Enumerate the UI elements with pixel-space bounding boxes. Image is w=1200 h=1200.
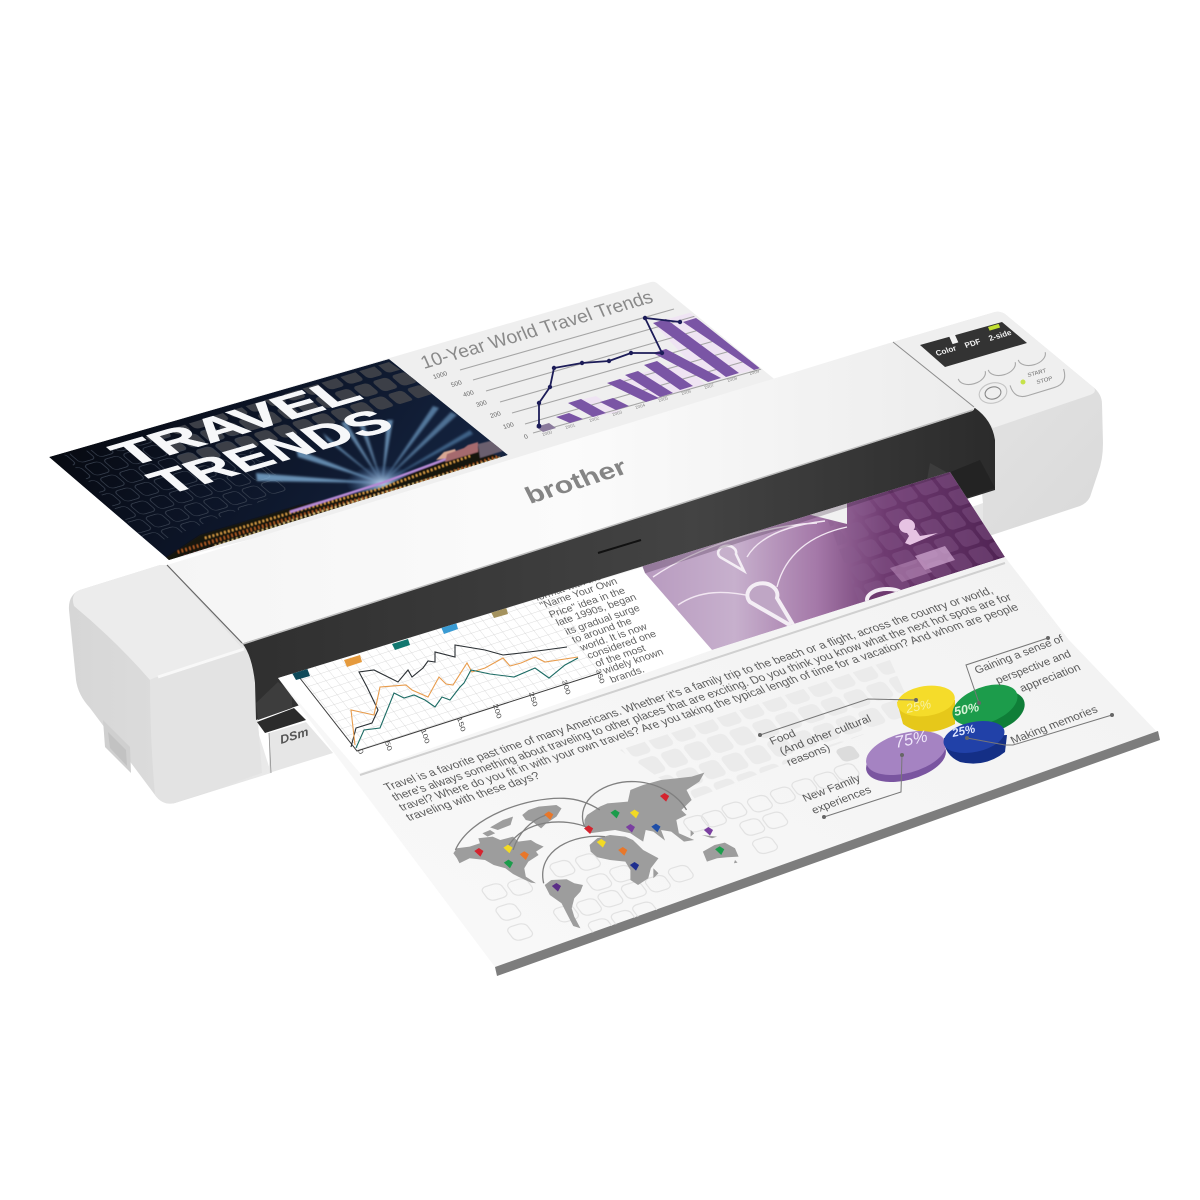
start stop labels [1020,368,1053,386]
chart x axis labels [356,668,606,756]
chart axis labels: 1000 [432,370,449,381]
chart axis labels: 100 [502,421,516,431]
brand story text column: its gradual surge [563,603,642,638]
brand story text column: to around the [570,616,634,646]
map pins [474,793,724,892]
purple slice [861,723,951,790]
pie callout labels: New Family [801,773,863,805]
brand story text column: format with the [533,572,604,604]
chart x axis labels: 0 [356,748,365,756]
chart axis labels: 500 [450,379,464,389]
faint tile backdrop [480,745,861,942]
chart x axis labels: 350 [594,668,606,686]
paper sheet: chart side [49,282,800,560]
pie callout labels: reasons) [785,742,833,769]
brand story text column: widely known [600,647,666,677]
brand story text column: of the most [593,643,648,670]
blue slice [941,716,1007,764]
chart bars [536,318,767,432]
bar and line chart: world travel trends [432,309,767,441]
USB port [103,720,131,773]
scanner body [69,312,1103,804]
green slice [947,676,1031,741]
intro paragraph: Travel is a favorite past time of many Americans. Whether it's a family trip to the beach or a flight, across the country or world, [381,584,996,793]
chart axis labels: 0 [523,433,530,441]
cover headline: TRAVEL TRENDS: TRENDS [137,402,405,501]
pie callout labels: perspective and [994,648,1073,687]
chart axis labels: 300 [475,399,489,409]
paper guide [947,460,995,504]
pie callout labels: Making memories [1009,704,1100,747]
start stop labels: STOP [1036,376,1053,386]
lower document emerging from scanner [278,460,1160,976]
yellow slice [895,682,957,732]
intro paragraph: travel? Where do you fit in with your own travels? Are you taking the typical length of time for a vacation? And whom are people [396,600,1022,813]
section divider [360,563,1005,775]
chart section background [278,565,712,773]
light beams [256,406,473,483]
purple world image panel [630,460,1005,650]
brand story text column: considered one [585,629,659,662]
brand story text column: late 1990s, began [554,592,639,629]
display screen with mode labels [920,322,1027,367]
continents [453,773,739,928]
pie callout labels: Gaining a sense of [973,633,1067,677]
chart axis labels: 2009 [748,368,760,376]
start stop labels: START [1027,368,1047,379]
chart axis labels: 2008 [726,375,738,383]
brand story text column: brands. [608,665,647,686]
chart line [537,316,682,428]
chart axis labels: 2006 [680,388,692,396]
display screen with mode labels: Color [934,344,958,358]
cover headline: TRAVEL TRENDS: TRAVEL [99,373,373,473]
flight arcs [455,782,687,883]
brand story text column: Price" idea in the [547,586,628,621]
dark cover panel [49,359,520,565]
paper sheet [278,472,1158,967]
line chart panel [292,592,606,756]
scanner left end cap [69,565,271,804]
pie percentages: 50% [953,700,980,719]
brand story text column: "Name Your Own [538,576,620,612]
chart x axis labels: 250 [527,691,539,709]
scanner lid [167,342,974,644]
scanner right end cap [893,312,1103,538]
chart x axis labels: 300 [560,679,572,697]
slot notch [598,540,641,553]
lower front strip with model badge [269,503,983,773]
chart x axis labels: 200 [491,703,503,721]
pie callout labels [768,633,1100,817]
chart axis labels: 2007 [703,382,715,390]
chart axis labels: 200 [489,410,503,420]
chart legend swatches [292,607,508,680]
faint upper tile backdrop [620,660,915,800]
world map with routes and pins [453,773,739,928]
pie percentages: 75% [893,727,929,752]
chart axis labels: 2002 [588,415,600,423]
chart series lines [351,645,567,747]
chart x axis labels: 100 [419,728,431,746]
person icon [899,519,938,545]
display screen with mode labels: 2-side [987,328,1014,343]
product scene: scanner with documents [49,282,1160,976]
chart axis labels: 2005 [657,395,669,403]
chart axis labels: 2001 [564,422,576,430]
brand story text column: world. It is now [577,622,650,654]
chart axis labels: 2004 [634,402,646,410]
scanner shadow on panel [642,472,950,574]
3D pie chart [861,676,1031,790]
paper feed slot [242,408,995,733]
night city skyline lights [166,440,503,560]
pie percentages [893,697,980,752]
chart x axis labels: 50 [383,740,394,753]
control buttons [958,352,1068,406]
pie callout labels: appreciation [1018,662,1083,695]
chart title: 10-Year World Travel Trends [417,286,656,373]
brand logo: brother [521,454,631,509]
chart axis labels: 2003 [611,409,623,417]
pale bar shadows [582,313,754,416]
top document feeding into scanner [49,282,800,565]
arcs [653,521,847,605]
pie callout labels: (And other cultural [778,713,873,758]
chart x axis labels: 150 [455,716,467,734]
pie callout leader lines [758,636,1114,819]
pie callout labels: experiences [810,784,874,817]
cover headline: TRAVEL TRENDS [99,373,405,501]
intro paragraph: traveling with these days? [403,769,543,823]
pie percentages: 25% [904,697,932,716]
location pins [718,498,907,628]
intro paragraph: there's always something about traveling to other places that are exciting. Do you think you know what the next hot spots are for [389,591,1014,803]
pie callout labels: Food [768,728,798,748]
brand story text column [536,579,664,683]
chart axis labels [432,368,760,441]
chart axis labels: 400 [462,389,476,399]
pie percentages: 25% [950,722,977,740]
display screen with mode labels: PDF [963,337,982,350]
gridlines [460,309,765,433]
chart axis labels: 2000 [541,429,553,437]
sheet thickness edge [495,731,1160,976]
lower front strip with model badge: DSm [279,725,310,747]
